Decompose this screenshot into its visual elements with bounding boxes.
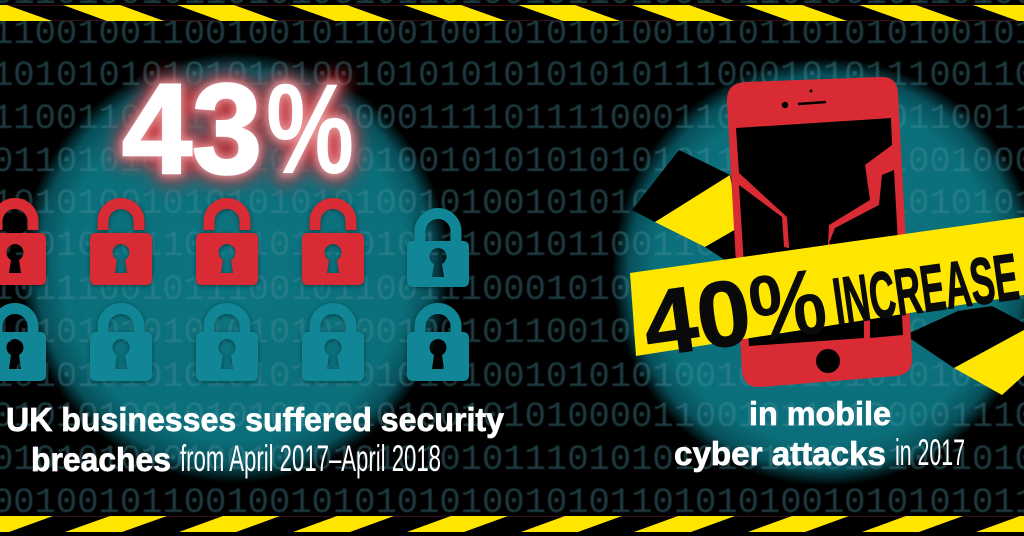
icon: closed teal lock top right [407,214,469,287]
phone speaker and camera [782,90,826,108]
headline: 43%: % [266,58,354,201]
icon: open red lock 2 [90,204,152,285]
binary code background: 1010101010101010100100101100100101010010011010010 [0,312,1024,353]
banner text: 40% increase [637,221,1024,377]
headline: 43%: 43 [122,58,262,201]
phone screen: cracked glass [736,118,903,346]
binary code background: 0010010110010010101010100101011010101001010101011 [0,482,1024,523]
text: mobile cyber attacks caption: cyber attacks [674,435,886,472]
icon: closed teal lock row 2 no.2 [90,308,152,381]
text: mobile cyber attacks caption [674,395,965,473]
icon: open red lock 3 [196,204,258,285]
binary code background: 1011100101110010110011100010100110010101011001010 [0,269,1024,310]
hazard strip: bottom [0,516,1024,536]
binary code background: 0101010101001010101010101110101010101010101001010 [0,439,1024,480]
headline: 43%: % [266,58,354,201]
icon: cracked red smartphone [727,77,912,387]
text: UK businesses caption: UK businesses suffered security [6,401,505,438]
headline: 43%: 43 [122,58,262,201]
hazard strip: top [0,5,1024,21]
lock grid [0,204,469,381]
binary code background: 0101010110101011101011100101100110101010101100101 [0,225,1024,266]
text: UK businesses caption [6,401,505,479]
icon: closed teal lock row 2 no.1 [0,308,46,381]
banner text: 40% increase: % [743,248,833,362]
binary code background: 1010100101010101010010100101010110101010101010101 [0,183,1024,224]
spotlight circle: left [20,53,450,483]
text: UK businesses caption: breaches [31,441,171,478]
icon: closed teal lock row 2 no.5 [407,308,469,381]
binary code background: 1010101010101010010101010101010111000101011100110 [0,55,1024,96]
icon: closed teal lock row 2 no.3 [196,308,258,381]
binary code background: 1100100110010010110010010101010010101101010100101 [0,13,1024,54]
text: mobile cyber attacks caption: in 2017 [895,432,965,473]
binary code background: 1010101010101010101010100101010100101010101010110 [0,356,1024,397]
headline: 43%: % [266,58,354,201]
hazard tape behind phone: right [905,306,1024,395]
binary code background: 0110101010101010101001010101010101101011001001000 [0,141,1024,182]
icon: open red lock 4 [302,204,364,285]
yellow tape banner [630,217,1024,377]
text: mobile cyber attacks caption: in mobile [749,395,891,432]
binary code background: 1100110101010101000011110111100011010100100110011 [0,98,1024,139]
headline: 43% [122,58,354,201]
spotlight circle: right [612,58,1024,486]
binary code background: 0101010010101010010100101010000110010111100001110 [0,396,1024,437]
text: UK businesses caption: from April 2017–April 2018 [180,438,441,479]
icon: closed teal lock row 2 no.4 [302,308,364,381]
headline: 43%: 43 [122,58,262,201]
banner text: 40% increase: 40 [637,259,757,377]
hazard tape behind phone: left [632,150,745,262]
phone home button [816,349,840,373]
icon: open red lock 1 [0,204,46,285]
